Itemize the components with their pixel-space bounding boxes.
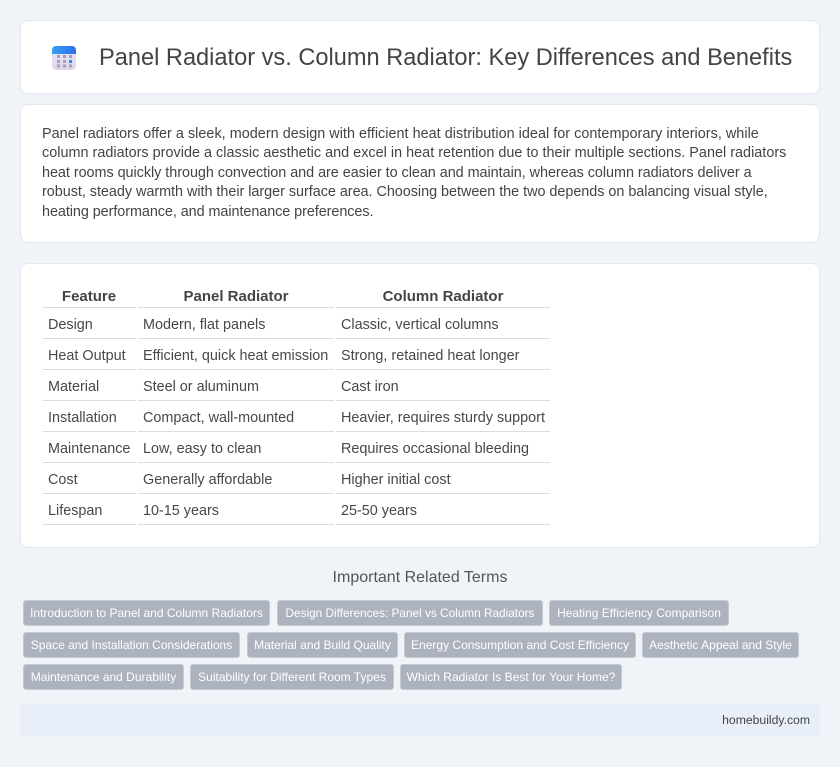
related terms tags: Space and Installation Considerations [31, 638, 232, 652]
text: Cast iron [341, 379, 399, 395]
text: Maintenance [48, 441, 130, 457]
text: Strong, retained heat longer [341, 348, 519, 364]
comparison table [42, 287, 550, 525]
related terms tags: Design Differences: Panel vs Column Radiators [286, 606, 534, 620]
text: Requires occasional bleeding [341, 441, 529, 457]
footer [20, 703, 820, 737]
panel: title card [20, 20, 820, 94]
text: 25-50 years [341, 503, 417, 519]
title: Panel Radiator vs. Column Radiator: Key Differences and Benefits [99, 45, 792, 71]
text: Design [48, 317, 93, 333]
related terms tags: Heating Efficiency Comparison [557, 606, 721, 620]
text block: summary: column radiators provide a classic aesthetic and excel in heat retention due to their multiple sections. Panel radiators [42, 145, 786, 161]
text: Efficient, quick heat emission [143, 348, 328, 364]
text: Column Radiator [383, 288, 503, 305]
text: Cost [48, 472, 78, 488]
related terms tags: Suitability for Different Room Types [198, 670, 386, 684]
related terms tags: Aesthetic Appeal and Style [649, 638, 792, 652]
text: Heat Output [48, 348, 126, 364]
text: Lifespan [48, 503, 102, 519]
text block: summary [42, 126, 786, 220]
text: Heavier, requires sturdy support [341, 410, 545, 426]
text: Installation [48, 410, 117, 426]
related terms tags: Material and Build Quality [254, 638, 391, 652]
text block: summary: robust, steady warmth with their larger surface area. Choosing between the two depends on balancing visual style, [42, 184, 768, 200]
related terms tags [23, 600, 799, 690]
text block: summary: heating performance, and maintenance preferences. [42, 204, 373, 220]
related terms tags: Energy Consumption and Cost Efficiency [411, 638, 629, 652]
text: Steel or aluminum [143, 379, 259, 395]
text: Low, easy to clean [143, 441, 261, 457]
text: Feature [62, 288, 116, 305]
related terms tags: Which Radiator Is Best for Your Home? [407, 670, 615, 684]
text: Panel Radiator [183, 288, 289, 305]
text block: summary: Panel radiators offer a sleek, modern design with efficient heat distribution ideal for contemporary interiors, while [42, 126, 759, 142]
text: Classic, vertical columns [341, 317, 499, 333]
footer: site name: homebuildy.com [722, 713, 810, 727]
heading: related terms: Important Related Terms [333, 569, 507, 586]
text: Higher initial cost [341, 472, 451, 488]
text block: summary: heat rooms quickly through convection and are easier to clean and maintain, whereas column radiators deliver a [42, 165, 752, 181]
panel: table card [20, 263, 820, 548]
text: Compact, wall-mounted [143, 410, 294, 426]
panel: summary card [20, 104, 820, 243]
text: 10-15 years [143, 503, 219, 519]
related terms tags: Introduction to Panel and Column Radiators [30, 606, 263, 620]
icon: calendar [52, 46, 76, 70]
text: Generally affordable [143, 472, 272, 488]
text: Material [48, 379, 99, 395]
text: Modern, flat panels [143, 317, 265, 333]
related terms tags: Maintenance and Durability [31, 670, 176, 684]
